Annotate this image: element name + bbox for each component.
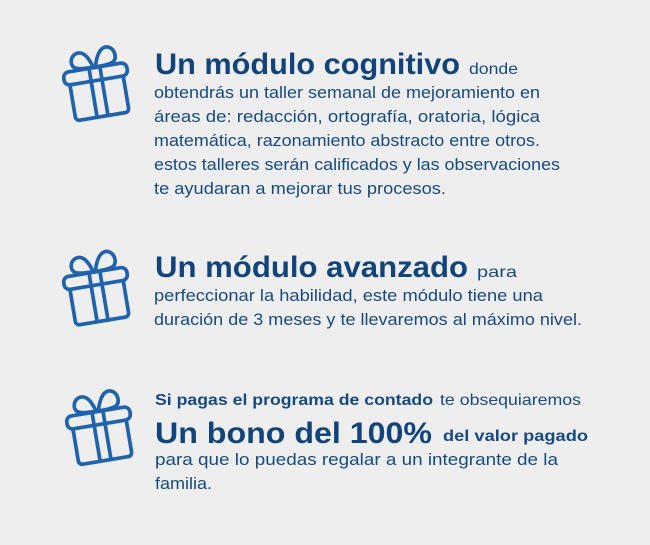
text: del valor pagado: del valor pagado (443, 428, 588, 445)
text: te obsequiaremos: te obsequiaremos (440, 392, 581, 409)
paragraph: cognitive description: estos talleres serán calificados y las observaciones (154, 156, 560, 174)
paragraph: bonus description: familia. (155, 475, 212, 493)
paragraph: advanced description: perfeccionar la habilidad, este módulo tiene una (154, 287, 544, 305)
icon: gift 1 (60, 44, 134, 122)
heading: Un módulo cognitivo: Un módulo cognitivo (155, 48, 460, 81)
text: Si pagas el programa de contado: Si pagas el programa de contado (155, 392, 433, 409)
paragraph: cognitive description: áreas de: redacción, ortografía, oratoria, lógica (154, 108, 541, 126)
icon: gift 2 (60, 249, 134, 326)
paragraph: cognitive description (154, 84, 560, 198)
block: advanced module (60, 249, 582, 329)
paragraph: cognitive description: te ayudaran a mejorar tus procesos. (154, 180, 446, 198)
icon: gift 3 (63, 388, 137, 466)
paragraph: bonus description (155, 451, 559, 493)
heading: Un bono del 100%: Un bono del 100% (155, 417, 432, 450)
paragraph: advanced description: duración de 3 meses y te llevaremos al máximo nivel. (154, 311, 582, 329)
heading: Un módulo avanzado: Un módulo avanzado (155, 251, 468, 284)
paragraph: cognitive description: matemática, razonamiento abstracto entre otros. (154, 132, 540, 150)
paragraph: cognitive description: obtendrás un taller semanal de mejoramiento en (154, 84, 540, 102)
block: cognitive module (60, 44, 560, 198)
paragraph: advanced description (154, 287, 582, 329)
text: para: para (477, 264, 517, 281)
text: donde: donde (469, 61, 518, 78)
block: bonus (63, 388, 588, 493)
paragraph: bonus description: para que lo puedas regalar a un integrante de la (155, 451, 559, 469)
